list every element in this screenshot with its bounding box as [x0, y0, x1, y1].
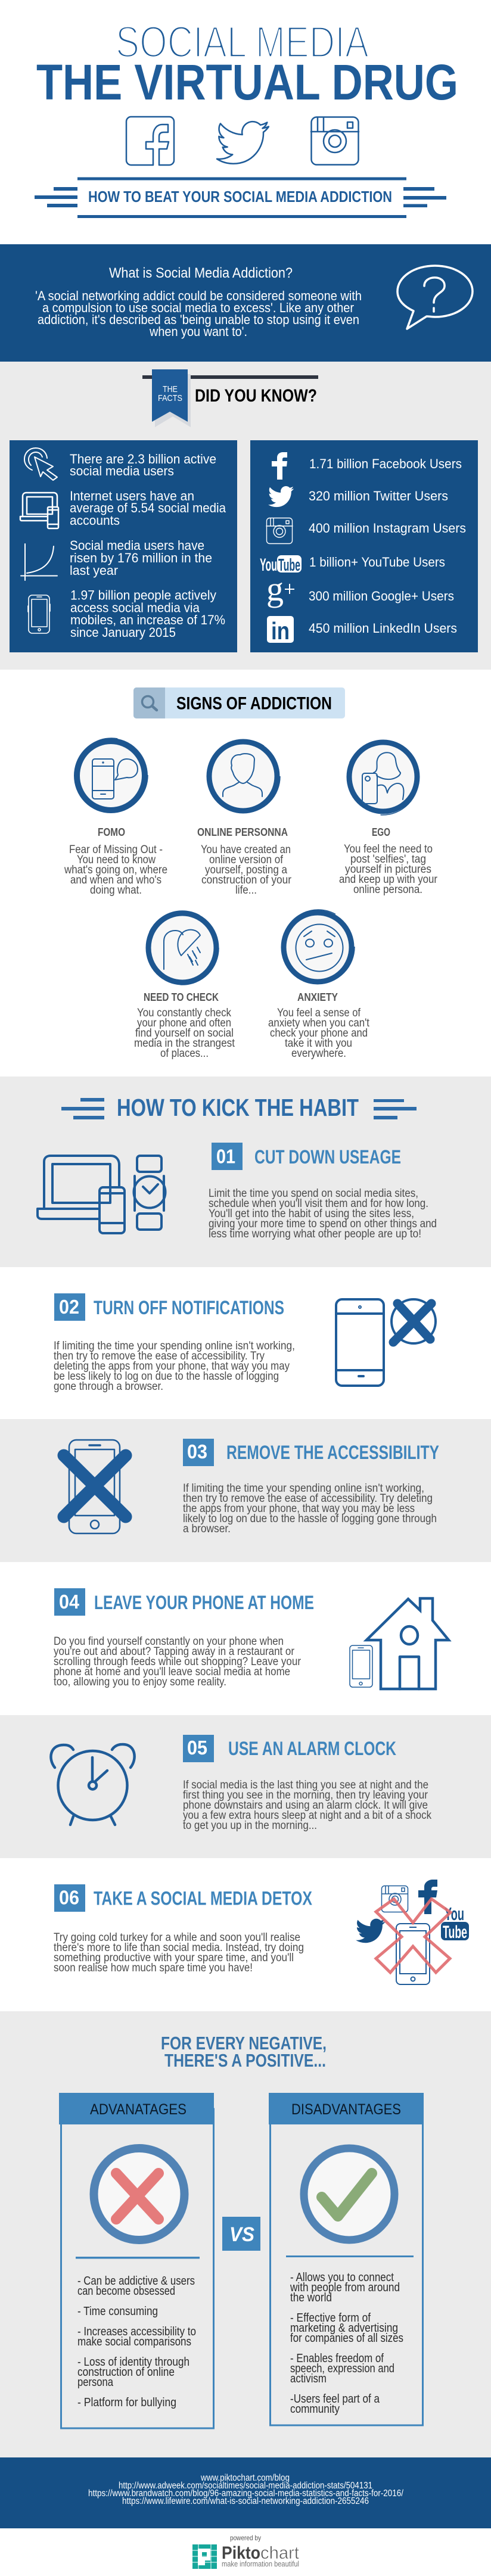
- icon: red cross in circle: [94, 2148, 185, 2240]
- panel: what is social media addiction: a compulsion to use social media to excess'. Like any other: [42, 300, 354, 315]
- heading: signs of addiction: [133, 687, 345, 718]
- sign: anxiety: check your phone and: [270, 1027, 368, 1040]
- icon: instagram: [266, 518, 293, 543]
- icon: linkedin: in: [271, 617, 290, 645]
- panel: disadvantages: with people from around: [290, 2281, 400, 2294]
- sign: online personna: You have created an: [201, 844, 291, 856]
- panel: facts: [10, 440, 237, 652]
- sign: anxiety: [268, 910, 370, 1060]
- piktochart logo: Pikto: [222, 2543, 260, 2563]
- subtitle banner: [35, 178, 446, 218]
- panel: step 02 turn off notifications: gone through a browser.: [54, 1380, 163, 1393]
- sign: FOMO: You need to know: [77, 854, 156, 866]
- panel: disadvantages: community: [290, 2403, 340, 2416]
- sign: FOMO: and when and who's: [70, 874, 161, 886]
- icon: selfie woman: [362, 752, 403, 804]
- panel: advantages: construction of online: [77, 2366, 175, 2379]
- sign: need to check: [134, 911, 235, 1060]
- panel: disadvantages: marketing & advertising: [290, 2322, 398, 2335]
- panel: platform user numbers: 1 billion+ YouTube Users: [309, 555, 445, 570]
- panel: step 03 remove the accessibility: likely to log on due to the hassle of logging gone through: [183, 1513, 437, 1525]
- panel: did you know section background: [0, 362, 491, 670]
- sign: ego: EGO: [372, 826, 390, 838]
- panel: step 05 use an alarm clock: phone downstairs and using an alarm clock. It will give: [183, 1799, 428, 1812]
- sign: anxiety: ANXIETY: [297, 991, 338, 1003]
- panel: facts: social media users: [70, 463, 174, 478]
- panel: disadvantages: for companies of all sizes: [290, 2332, 403, 2345]
- sign: online personna: ONLINE PERSONNA: [197, 826, 288, 838]
- panel: advantages: - Loss of identity through: [77, 2356, 189, 2369]
- sign: need to check: You constantly check: [137, 1007, 231, 1019]
- sign: ego: online persona.: [353, 883, 422, 896]
- panel: platform user numbers: 450 million LinkedIn Users: [309, 621, 457, 636]
- sign: online personna: construction of your: [201, 874, 292, 886]
- piktochart logo: chart: [260, 2543, 300, 2563]
- icon: laptop phone and watch: [38, 1156, 166, 1233]
- heading: did you know with ribbon: [142, 369, 318, 427]
- sign: need to check: media in the strangest: [134, 1037, 235, 1050]
- panel: what is social media addiction: addiction, it's described as 'being unable to stop using it even: [38, 312, 359, 327]
- panel: disadvantages: [269, 2093, 424, 2425]
- panel: step 06 take a social media detox: Try going cold turkey for a while and soon you'll realise: [54, 1931, 300, 1944]
- panel: disadvantages: speech, expression and: [290, 2362, 394, 2375]
- panel: advantages: - Increases accessibility to: [77, 2325, 196, 2338]
- panel: step 03 remove the accessibility: If limiting the time your spending online isn't working,: [183, 1482, 424, 1495]
- sign: FOMO: [64, 738, 167, 897]
- panel: step 06 take a social media detox: 06: [59, 1886, 79, 1909]
- icon: youtube: You: [260, 555, 277, 575]
- sign: online personna: yourself, posting a: [205, 864, 287, 876]
- icon: crossed out social media and phone: You: [445, 1903, 464, 1924]
- heading: signs of addiction: SIGNS OF ADDICTION: [176, 693, 332, 714]
- sign: ego: [339, 741, 438, 896]
- panel: step 03 remove the accessibility: the apps from your phone, that way you may be less: [183, 1502, 415, 1515]
- badge: versus: [222, 2217, 260, 2251]
- panel: step 04 leave your phone at home: phone at home and you'll leave social media at home: [54, 1666, 290, 1678]
- panel: step 03 remove the accessibility: [0, 1419, 491, 1562]
- panel: step 06 take a social media detox: soon realise how much spare time you have!: [54, 1962, 253, 1974]
- sign: online personna: online version of: [209, 854, 284, 866]
- icon: smartphone: [28, 595, 50, 633]
- heading: for every negative: THERE'S A POSITIVE...: [164, 2050, 326, 2071]
- icon: alarm clock: [51, 1744, 135, 1825]
- panel: step 01 cut down useage: You'll get into the habit of using the sites less,: [209, 1208, 414, 1220]
- panel: step 04 leave your phone at home: [54, 1588, 449, 1689]
- panel: advantages: - Platform for bullying: [77, 2396, 176, 2409]
- sign: FOMO: Fear of Missing Out -: [69, 844, 163, 856]
- panel: facts: Social media users have: [70, 538, 204, 553]
- sign: online personna: life...: [235, 884, 257, 897]
- icon: worried face: [296, 925, 343, 971]
- icon: cursor click: [24, 448, 57, 480]
- panel: step 04 leave your phone at home: you're out and about? Tapping away in a restaurant or: [54, 1645, 295, 1658]
- panel: advantages: ADVANATAGES: [90, 2101, 187, 2118]
- sign: need to check: your phone and often: [137, 1017, 231, 1029]
- panel: facts: There are 2.3 billion active: [70, 452, 216, 466]
- sign: anxiety: everywhere.: [291, 1047, 346, 1060]
- piktochart logo: [192, 2534, 300, 2569]
- panel: step 06 take a social media detox: something productive with your spare time, and you'll: [54, 1952, 294, 1964]
- sign: need to check: of places...: [160, 1047, 209, 1060]
- icon: crossed out social media and phone: [356, 1880, 469, 1984]
- badge: versus: VS: [229, 2223, 254, 2246]
- panel: platform user numbers: 300 million Google+ Users: [309, 589, 454, 603]
- icon: twitter outline: [217, 122, 269, 164]
- sign: online personna: [197, 740, 292, 897]
- panel: disadvantages: the world: [290, 2291, 332, 2304]
- heading: did you know with ribbon: DID YOU KNOW?: [195, 386, 317, 406]
- panel: step 04 leave your phone at home: scrolling through feeds while out shopping? Leave your: [54, 1656, 302, 1668]
- sign: FOMO: FOMO: [98, 826, 125, 838]
- sign: anxiety: anxiety when you can't: [268, 1017, 370, 1029]
- panel: what is social media addiction: [0, 244, 491, 362]
- panel: step 05 use an alarm clock: 05: [187, 1737, 207, 1759]
- panel: advantages: - Can be addictive & users: [77, 2275, 195, 2288]
- panel: facts: access social media via: [70, 601, 200, 615]
- icon: crossed out social media and phone: Tube: [443, 1922, 467, 1942]
- icon: phone with crossed bell: [336, 1299, 436, 1386]
- panel: step 01 cut down useage: Limit the time you spend on social media sites,: [209, 1187, 418, 1200]
- panel: step 02 turn off notifications: If limiting the time your spending online isn't working,: [54, 1340, 295, 1352]
- heading: for every negative: [161, 2033, 327, 2071]
- panel: sources footer: https://www.lifewire.com/what-is-social-networking-addiction-2655246: [122, 2496, 369, 2506]
- icon: question speech bubble: [397, 266, 473, 329]
- panel: facts: accounts: [70, 513, 120, 528]
- icon: twitter: [268, 486, 294, 507]
- icon: google plus: g: [266, 570, 284, 608]
- sign: FOMO: doing what.: [90, 884, 142, 897]
- sign: need to check: NEED TO CHECK: [144, 991, 219, 1003]
- heading: did you know with ribbon: THE: [163, 384, 178, 394]
- panel: sources footer: [0, 2457, 491, 2528]
- panel: step 02 turn off notifications: [54, 1293, 436, 1393]
- panel: step 05 use an alarm clock: you a few extra hours sleep at night and a bit of a shock: [183, 1809, 431, 1822]
- panel: what is social media addiction: when you want to'.: [149, 324, 247, 339]
- icon: green tick in circle: [304, 2148, 394, 2240]
- panel: step 01 cut down useage: giving your more time to spend on other things and: [209, 1218, 437, 1230]
- panel: disadvantages: - Effective form of: [290, 2311, 371, 2325]
- panel: step 05 use an alarm clock: to get you up in the morning...: [183, 1819, 317, 1832]
- panel: step 06 take a social media detox: TAKE A SOCIAL MEDIA DETOX: [94, 1887, 313, 1909]
- panel: step 05 use an alarm clock: USE AN ALARM CLOCK: [228, 1738, 396, 1759]
- panel: facts: Internet users have an: [70, 489, 194, 503]
- sign: FOMO: what's going on, where: [64, 864, 167, 876]
- heading: how to kick the habit: HOW TO KICK THE HABIT: [117, 1094, 359, 1121]
- panel: step 05 use an alarm clock: first thing you see in the morning, then try leaving your: [183, 1789, 428, 1802]
- panel: platform user numbers: 1.71 billion Facebook Users: [309, 456, 462, 471]
- panel: step 03 remove the accessibility: then try to remove the ease of accessibility. Try deleting: [183, 1492, 433, 1505]
- panel: step 02 turn off notifications: be less likely to log on due to the hassle of logging: [54, 1370, 279, 1383]
- icon: shower: [164, 930, 200, 969]
- panel: facts: 1.97 billion people actively: [70, 587, 216, 603]
- sign: anxiety: You feel a sense of: [277, 1007, 361, 1019]
- title: [36, 17, 458, 110]
- icon: phone and speech bubble: [92, 759, 138, 799]
- piktochart logo: make information beautiful: [222, 2560, 299, 2568]
- icon: instagram outline: [311, 117, 359, 164]
- panel: facts: mobiles, an increase of 17%: [70, 612, 225, 627]
- panel: sources footer: http://www.adweek.com/socialtimes/social-media-addiction-stats/504131: [119, 2481, 372, 2491]
- panel: step 04 leave your phone at home: too, allowing you to enjoy some reality.: [54, 1676, 226, 1688]
- sign: ego: post 'selfies', tag: [350, 853, 426, 866]
- subtitle banner: HOW TO BEAT YOUR SOCIAL MEDIA ADDICTION: [88, 188, 392, 206]
- panel: sources footer: https://www.brandwatch.com/blog/96-amazing-social-media-statistics-and-facts-for-2016/: [88, 2488, 404, 2499]
- panel: what is social media addiction: What is Social Media Addiction?: [109, 265, 293, 281]
- panel: step 06 take a social media detox: [54, 1880, 469, 1984]
- panel: what is social media addiction: 'A social networking addict could be considered someone with: [35, 288, 362, 303]
- icon: growth graph: [21, 544, 57, 580]
- panel: step 05 use an alarm clock: If social media is the last thing you see at night and the: [183, 1779, 428, 1791]
- icon: house and phone: [350, 1598, 449, 1689]
- panel: advantages: [59, 2093, 214, 2428]
- panel: step 02 turn off notifications: TURN OFF NOTIFICATIONS: [94, 1297, 284, 1318]
- panel: advantages: make social comparisons: [77, 2335, 191, 2348]
- panel: step 01 cut down useage: less time worrying what other people are up to!: [209, 1228, 421, 1240]
- panel: facts: last year: [70, 563, 118, 578]
- panel: disadvantages: - Allows you to connect: [290, 2271, 394, 2284]
- panel: advantages versus disadvantages: [0, 2011, 491, 2457]
- panel: platform user numbers: 320 million Twitter Users: [309, 489, 448, 503]
- sign: need to check: find yourself on social: [135, 1027, 234, 1040]
- panel: platform user numbers: [250, 440, 478, 652]
- panel: step 04 leave your phone at home: Do you find yourself constantly on your phone when: [54, 1635, 284, 1648]
- panel: step 03 remove the accessibility: 03: [187, 1441, 207, 1463]
- panel: step 02 turn off notifications: then try to remove the ease of accessibility. Try: [54, 1350, 265, 1362]
- panel: disadvantages: -Users feel part of a: [290, 2393, 380, 2406]
- panel: disadvantages: - Enables freedom of: [290, 2352, 384, 2365]
- icon: facebook outline: [126, 117, 174, 165]
- panel: step 06 take a social media detox: there's more to life than social media. Instead, try doing: [54, 1942, 304, 1954]
- panel: sources footer: www.piktochart.com/blog: [200, 2473, 290, 2483]
- panel: platform user numbers: 400 million Instagram Users: [309, 521, 466, 536]
- icon: facebook: [272, 452, 287, 480]
- panel: advantages: persona: [77, 2376, 114, 2389]
- heading: did you know with ribbon: FACTS: [158, 393, 182, 403]
- panel: step 03 remove the accessibility: a browser.: [183, 1523, 231, 1535]
- panel: facts: average of 5.54 social media: [70, 500, 226, 515]
- icon: google plus: [266, 570, 294, 608]
- title: SOCIAL MEDIA: [116, 17, 369, 67]
- panel: step 02 turn off notifications: deleting the apps from your phone, that way you may: [54, 1360, 290, 1373]
- panel: step 05 use an alarm clock: [0, 1715, 491, 1858]
- panel: disadvantages: activism: [290, 2372, 327, 2385]
- icon: youtube: Tube: [278, 556, 300, 575]
- heading: for every negative: FOR EVERY NEGATIVE,: [161, 2033, 327, 2054]
- panel: disadvantages: DISADVANTAGES: [291, 2101, 401, 2118]
- panel: step 04 leave your phone at home: LEAVE YOUR PHONE AT HOME: [94, 1592, 314, 1613]
- icon: crossed out phone: [64, 1440, 126, 1533]
- panel: step 01 cut down useage: schedule when you'll visit them and for how long.: [209, 1197, 428, 1210]
- sign: ego: and keep up with your: [339, 873, 438, 886]
- icon: man head and shoulders: [223, 754, 262, 797]
- sign: anxiety: take it with you: [285, 1037, 352, 1050]
- panel: facts: since January 2015: [70, 625, 176, 640]
- icon: piktochart mark: [192, 2544, 217, 2569]
- panel: step 01 cut down useage: CUT DOWN USEAGE: [254, 1146, 401, 1168]
- piktochart logo: powered by: [230, 2534, 261, 2542]
- icon: laptop and phone: [20, 493, 58, 528]
- panel: advantages: can become obsessed: [77, 2285, 175, 2298]
- panel: step 04 leave your phone at home: 04: [59, 1591, 80, 1613]
- panel: step 01 cut down useage: [0, 1077, 491, 1267]
- sign: ego: yourself in pictures: [345, 863, 431, 876]
- panel: step 02 turn off notifications: 02: [59, 1296, 79, 1318]
- sign: ego: You feel the need to: [344, 843, 433, 855]
- panel: advantages: - Time consuming: [77, 2305, 158, 2318]
- panel: facts: risen by 176 million in the: [70, 550, 212, 565]
- panel: step 01 cut down useage: 01: [216, 1145, 235, 1168]
